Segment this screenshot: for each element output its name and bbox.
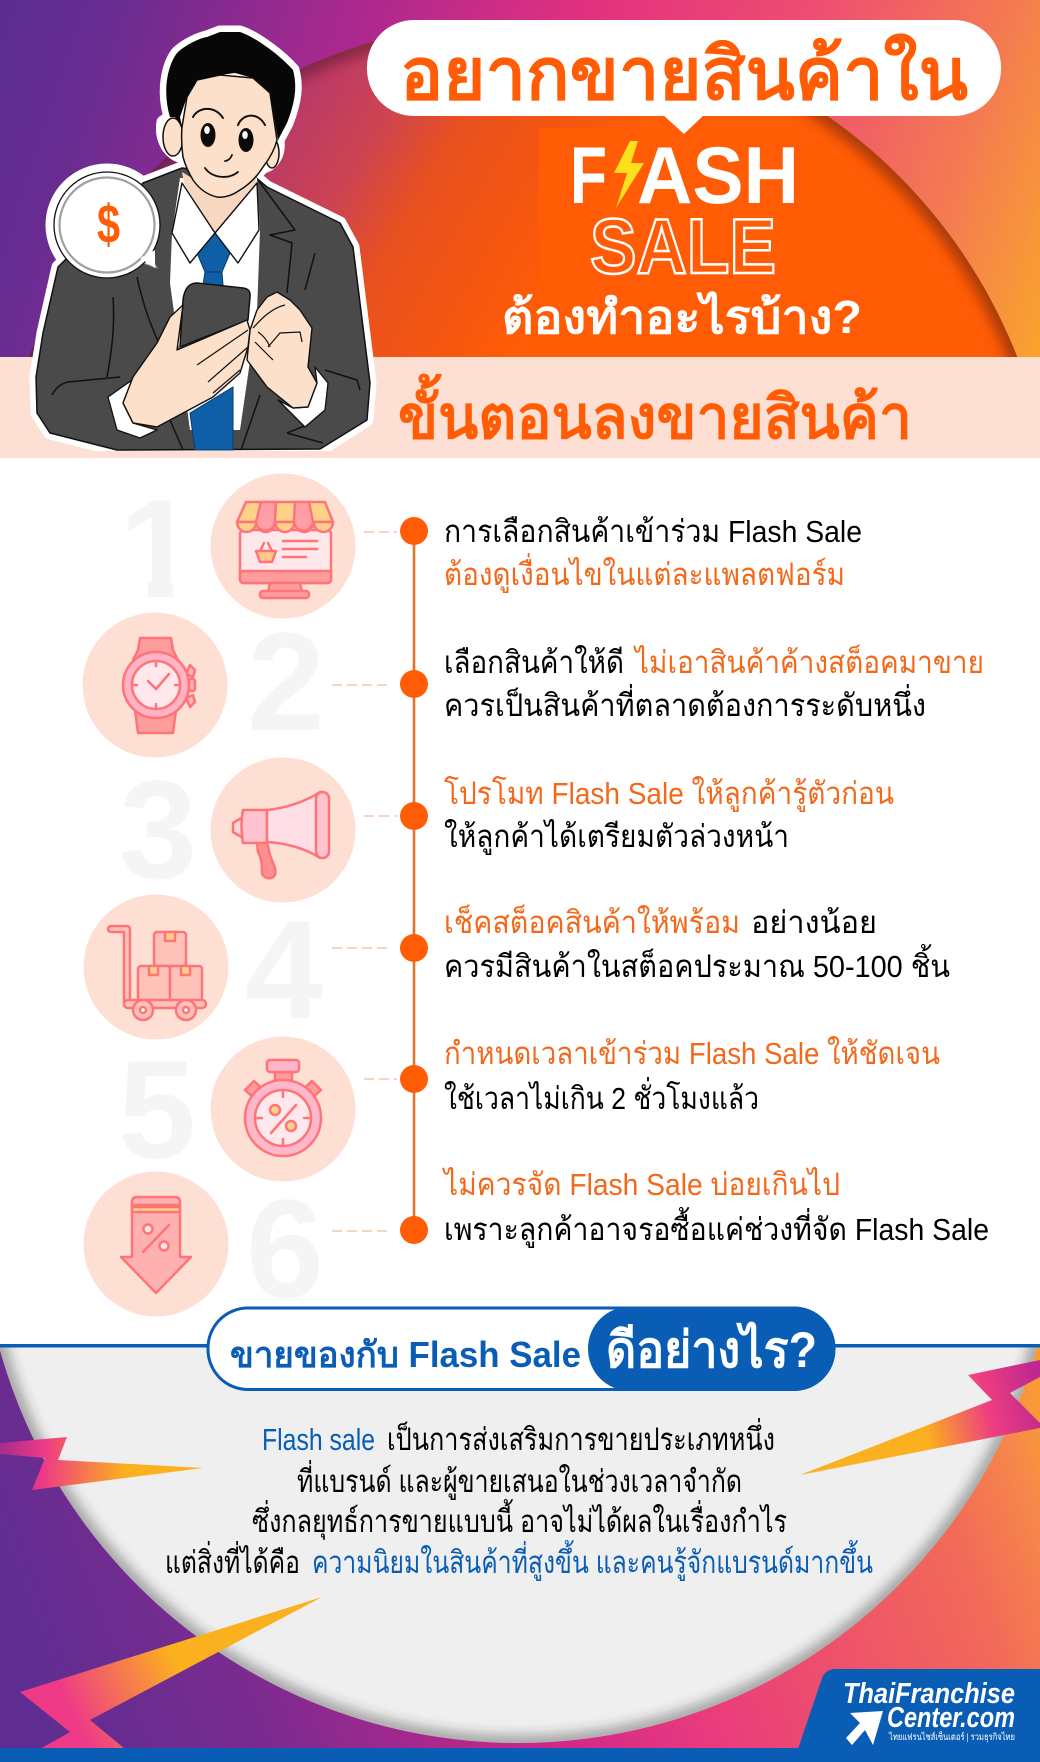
icon: wrist watch [123, 638, 195, 733]
sticker outline [36, 32, 370, 450]
step 1 text [444, 514, 862, 593]
nose and mouth [205, 155, 238, 177]
step 5 text: ใช้เวลาไม่เกิน 2 ชั่วโมงแล้ว [444, 1077, 759, 1116]
hair [166, 32, 295, 140]
icon: megaphone [233, 792, 329, 878]
logo: Flash Sale [570, 131, 799, 290]
logo: ThaiFranchise Center [798, 1669, 1040, 1749]
big step numbers: 1 [119, 470, 197, 627]
step 2 text: ควรเป็นสินค้าที่ตลาดต้องการระดับหนึ่ง [444, 684, 926, 723]
icon: arrow [846, 1711, 883, 1745]
big step numbers: 4 [245, 891, 323, 1048]
step 3 text [444, 776, 894, 855]
benefits paragraph: แต่สิ่งที่ได้คือ [165, 1541, 300, 1580]
step 2 text: เลือกสินค้าให้ดี [444, 645, 624, 680]
benefits paragraph: เป็นการส่งเสริมการขายประเภทหนึ่ง [387, 1418, 775, 1457]
right hand [247, 292, 317, 408]
jacket detail lines [52, 180, 360, 450]
lightning bolts [0, 1360, 1040, 1749]
step 6 text: เพราะลูกค้าอาจรอซื้อแค่ช่วงที่จัด Flash Sale [444, 1207, 989, 1248]
right cuff [278, 367, 328, 427]
speech balloon with dollar: $ [97, 193, 120, 255]
step 4 text [444, 904, 950, 984]
step 4 text: ควรมีสินค้าในสต็อคประมาณ 50-100 ชิ้น [444, 944, 950, 984]
speech balloon with dollar [54, 172, 160, 278]
illustration: businessman with phone [36, 32, 370, 450]
timeline [332, 517, 428, 1244]
benefits heading pill [208, 1306, 835, 1391]
benefits heading pill: ดีอย่างไร? [606, 1321, 817, 1378]
step 1 text: ต้องดูเงื่อนไขในแต่ละแพลตฟอร์ม [444, 553, 845, 593]
section heading: ขั้นตอนลงขายสินค้า [398, 373, 912, 451]
big step numbers: 3 [119, 751, 197, 908]
icon: cart with boxes [108, 926, 206, 1020]
ears [163, 118, 279, 168]
neck [182, 172, 257, 233]
big step numbers: 6 [246, 1170, 324, 1327]
benefits paragraph [165, 1418, 873, 1581]
shirt [170, 178, 260, 430]
logo: Flash Sale: SALE [590, 202, 776, 290]
icon: online store [237, 502, 333, 598]
benefits paragraph: ความนิยมในสินค้าที่สูงขึ้น และคนรู้จักแบรนด์มากขึ้น [312, 1540, 873, 1581]
panel: benefits background [0, 1348, 1040, 1748]
step 4 text: เช็คสต็อคสินค้าให้พร้อม [444, 904, 740, 940]
step 5 text: กำหนดเวลาเข้าร่วม Flash Sale ให้ชัดเจน [444, 1036, 940, 1071]
logo: Flash Sale: F [570, 131, 607, 221]
subtitle: ต้องทำอะไรบ้าง? [502, 291, 862, 343]
big step numbers [115, 470, 325, 1327]
benefits paragraph: Flash sale [262, 1422, 375, 1457]
tie [190, 233, 233, 450]
step 3 text: ให้ลูกค้าได้เตรียมตัวล่วงหน้า [444, 819, 789, 855]
step 1 text: การเลือกสินค้าเข้าร่วม Flash Sale [444, 514, 862, 549]
logo: Flash Sale: ASH [637, 131, 799, 221]
eyes [200, 123, 254, 152]
step 3 text: โปรโมท Flash Sale ให้ลูกค้ารู้ตัวก่อน [444, 776, 894, 812]
speech bubble with title [367, 20, 1001, 134]
icon: stopwatch percent [245, 1060, 321, 1156]
big step numbers: 5 [118, 1031, 196, 1188]
benefits heading pill: ขายของกับ Flash Sale [230, 1334, 581, 1375]
blue divider line [0, 1344, 1040, 1348]
left hand [123, 305, 250, 427]
benefits paragraph: ที่แบรนด์ และผู้ขายเสนอในช่วงเวลาจำกัด [297, 1460, 742, 1500]
finger lines [197, 305, 302, 393]
step 2 text [444, 644, 984, 723]
step 2 text: ไม่เอาสินค้าค้างสต็อคมาขาย [632, 644, 984, 680]
collar [172, 183, 259, 263]
face [182, 75, 277, 197]
step 5 text [444, 1036, 940, 1116]
jacket [36, 168, 370, 450]
panel: section heading band [0, 357, 1040, 458]
footer bar [0, 1748, 1040, 1762]
title: อยากขายสินค้าใน [400, 32, 968, 115]
icon: discount down arrow [121, 1197, 191, 1293]
step 6 text: ไม่ควรจัด Flash Sale บ่อยเกินไป [441, 1167, 840, 1202]
panel: header gradient background [0, 0, 1040, 357]
eyebrows [193, 109, 265, 125]
step icon circles [82, 474, 356, 1316]
benefits paragraph: ซึ่งกลยุทธ์การขายแบบนี้ อาจไม่ได้ผลในเรื่องกำไร [252, 1499, 787, 1541]
step 6 text [441, 1167, 989, 1248]
step 4 text: อย่างน้อย [751, 905, 877, 940]
big step numbers: 2 [247, 603, 325, 760]
logo: ThaiFranchise Center: ThaiFranchise [843, 1678, 1015, 1710]
left cuff [108, 380, 157, 438]
phone [180, 283, 250, 347]
